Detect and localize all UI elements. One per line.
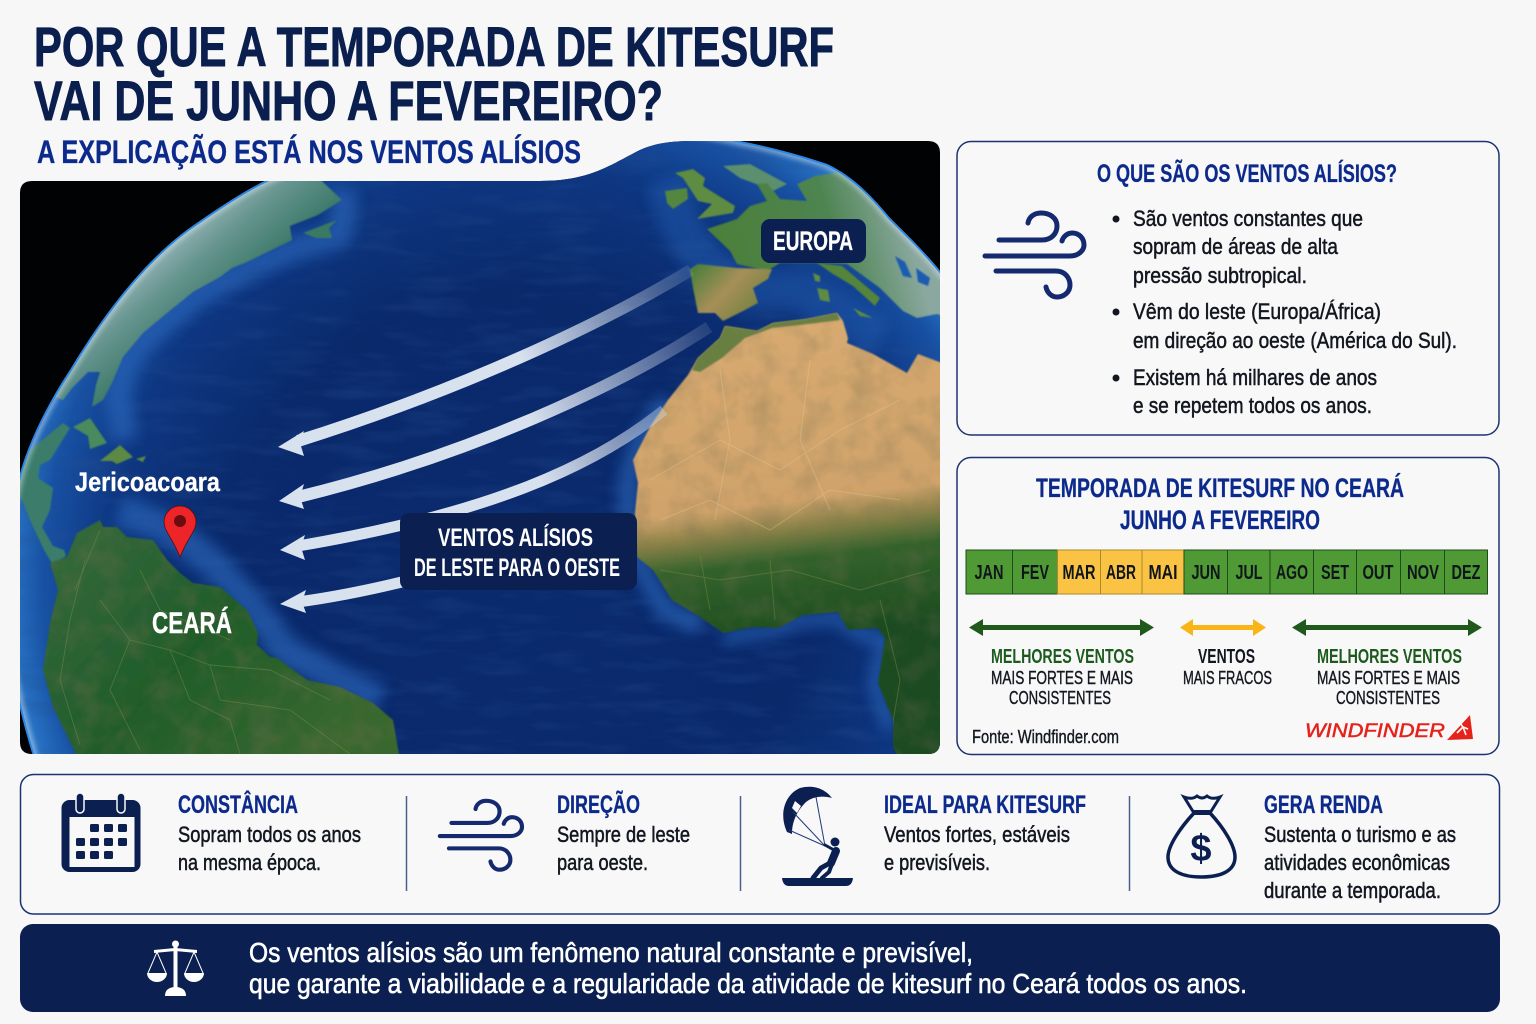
text: constância: CONSTÂNCIA bbox=[178, 789, 298, 819]
land: Scandinavia bbox=[723, 164, 787, 191]
bullet list: São ventos constantes que bbox=[1133, 206, 1363, 231]
bullet list: em direção ao oeste (América do Sul). bbox=[1133, 328, 1457, 353]
month calendar bar: DEZ bbox=[1452, 562, 1480, 584]
label: Ceará: CEARÁ bbox=[152, 606, 232, 640]
icon: location pin bbox=[164, 506, 196, 557]
month calendar bar: JUN bbox=[1192, 562, 1220, 584]
logo: Windfinder bbox=[1305, 715, 1473, 742]
icon: scales bbox=[147, 940, 204, 996]
month calendar bar: ABR bbox=[1106, 562, 1136, 584]
legend: best winds right: MAIS FORTES E MAIS bbox=[1317, 668, 1460, 688]
land: North America bbox=[50, 170, 342, 407]
text: gera renda: atividades econômicas bbox=[1264, 850, 1450, 875]
month calendar bar: SET bbox=[1321, 562, 1349, 584]
conclusion text: Os ventos alísios são um fenômeno natural constante e previsível, bbox=[249, 937, 973, 968]
legend: best winds right: CONSISTENTES bbox=[1336, 688, 1440, 708]
text: gera renda: GERA RENDA bbox=[1264, 791, 1383, 819]
legend: best winds left: MAIS FORTES E MAIS bbox=[991, 668, 1133, 688]
panel: benefits bbox=[20, 774, 1500, 914]
land: Hispaniola bbox=[100, 445, 146, 464]
land: Iberia bbox=[690, 264, 772, 321]
land: Europe mainland bbox=[707, 172, 950, 318]
text: gera renda bbox=[1264, 791, 1456, 903]
text: ideal para kitesurf: Ventos fortes, estáveis bbox=[884, 822, 1070, 847]
heading: O QUE SÃO OS VENTOS ALÍSIOS? bbox=[1097, 158, 1397, 188]
source: Fonte: Windfinder.com bbox=[972, 727, 1119, 747]
bullet list: pressão subtropical. bbox=[1133, 263, 1307, 288]
land: South America bbox=[40, 515, 405, 760]
text: direção bbox=[557, 789, 690, 875]
arrow 2 bbox=[279, 327, 709, 509]
label: ventos alísios bbox=[400, 513, 637, 590]
arrow: weaker winds bbox=[1180, 619, 1266, 636]
text: ideal para kitesurf bbox=[884, 791, 1086, 875]
month calendar bar: AGO bbox=[1276, 562, 1308, 584]
arrow 4 bbox=[280, 580, 410, 613]
bullet list: e se repetem todos os anos. bbox=[1133, 393, 1372, 418]
ocean texture bbox=[20, 152, 842, 750]
icon: wind bbox=[985, 213, 1084, 297]
land: Newfoundland bbox=[303, 220, 337, 238]
month calendar bar: JUL bbox=[1236, 562, 1262, 584]
land: Black Sea and eastern seas bbox=[895, 256, 930, 286]
panel: o que são os ventos alísios bbox=[957, 142, 1499, 435]
text: ideal para kitesurf: IDEAL PARA KITESURF bbox=[884, 791, 1086, 819]
month calendar bar bbox=[966, 550, 1488, 594]
land: Italy bbox=[817, 263, 880, 306]
month calendar bar: OUT bbox=[1362, 562, 1394, 584]
panel: temporada de kitesurf bbox=[957, 458, 1499, 754]
heading: JUNHO A FEVEREIRO bbox=[1120, 505, 1320, 535]
arrow: best winds left bbox=[969, 619, 1154, 636]
text: direção: DIREÇÃO bbox=[557, 789, 640, 819]
label: ventos alísios: DE LESTE PARA O OESTE bbox=[414, 554, 620, 582]
month calendar bar: MAR bbox=[1062, 562, 1096, 584]
label: ventos alísios: VENTOS ALÍSIOS bbox=[438, 523, 593, 552]
coastal shelf glow bbox=[118, 180, 890, 730]
text: constância bbox=[178, 789, 361, 875]
month calendar bar: FEV bbox=[1021, 562, 1049, 584]
arrow 3 bbox=[280, 410, 664, 560]
arrow: best winds right bbox=[1292, 619, 1482, 636]
text: direção: para oeste. bbox=[557, 850, 648, 875]
legend: best winds left bbox=[991, 646, 1134, 708]
atmosphere rim bbox=[5, 125, 945, 762]
text: constância: na mesma época. bbox=[178, 850, 321, 875]
icon: money bag: $ bbox=[1190, 828, 1212, 870]
bullet list bbox=[1112, 206, 1457, 418]
heading: TEMPORADA DE KITESURF NO CEARÁ bbox=[1036, 472, 1404, 503]
icon: money bag bbox=[1168, 796, 1235, 877]
month calendar bar: NOV bbox=[1407, 562, 1439, 584]
legend: weaker winds: MAIS FRACOS bbox=[1183, 668, 1272, 688]
bullet list: Vêm do leste (Europa/África) bbox=[1133, 299, 1381, 324]
land: Cuba bbox=[73, 418, 107, 449]
land: Morocco green fringe bbox=[692, 313, 840, 372]
month calendar bar: MAI bbox=[1148, 562, 1178, 584]
bullet list: sopram de áreas de alta bbox=[1133, 234, 1339, 259]
conclusion text bbox=[249, 937, 1247, 999]
land: Africa bbox=[625, 310, 950, 760]
conclusion text: que garante a viabilidade e a regularidade da atividade de kitesurf no Ceará todos os anos. bbox=[249, 968, 1247, 999]
heading bbox=[1036, 472, 1404, 535]
label: Jericoacoara: Jericoacoara bbox=[75, 467, 221, 497]
dividers bbox=[406, 796, 1130, 891]
text: constância: Sopram todos os anos bbox=[178, 822, 361, 847]
land: Mediterranean islands bbox=[813, 273, 873, 318]
icon: calendar bbox=[62, 793, 140, 872]
icon: wind small bbox=[440, 801, 522, 870]
legend: weaker winds: VENTOS bbox=[1198, 646, 1255, 668]
text: direção: Sempre de leste bbox=[557, 822, 690, 847]
text: gera renda: durante a temporada. bbox=[1264, 878, 1441, 903]
globe bbox=[20, 141, 940, 754]
logo: Windfinder: WINDFINDER bbox=[1305, 721, 1445, 742]
legend: best winds left: CONSISTENTES bbox=[1009, 688, 1111, 708]
icon: kitesurfer bbox=[782, 787, 853, 886]
month calendar bar: JAN bbox=[974, 562, 1004, 584]
land: Central America bbox=[20, 422, 70, 562]
subtitle: A EXPLICAÇÃO ESTÁ NOS VENTOS ALÍSIOS bbox=[37, 134, 581, 170]
legend: best winds left: MELHORES VENTOS bbox=[991, 646, 1134, 668]
panel: globe map bbox=[20, 141, 940, 754]
text: gera renda: Sustenta o turismo e as bbox=[1264, 822, 1456, 847]
arrow 1 bbox=[278, 270, 691, 456]
bullet list: Existem há milhares de anos bbox=[1133, 365, 1377, 390]
legend: weaker winds bbox=[1183, 646, 1272, 688]
land: Ireland bbox=[665, 188, 688, 209]
label: Europa: EUROPA bbox=[773, 226, 853, 256]
land: Britain bbox=[675, 169, 735, 219]
title bbox=[34, 15, 834, 132]
title: POR QUE A TEMPORADA DE KITESURF bbox=[34, 15, 834, 78]
label: Europa bbox=[761, 219, 866, 263]
text: ideal para kitesurf: e previsíveis. bbox=[884, 850, 990, 875]
title: VAI DE JUNHO A FEVEREIRO? bbox=[34, 69, 663, 132]
legend: best winds right bbox=[1317, 646, 1462, 708]
legend: best winds right: MELHORES VENTOS bbox=[1317, 646, 1462, 668]
land texture bbox=[625, 310, 945, 760]
footer banner bbox=[20, 924, 1500, 1012]
